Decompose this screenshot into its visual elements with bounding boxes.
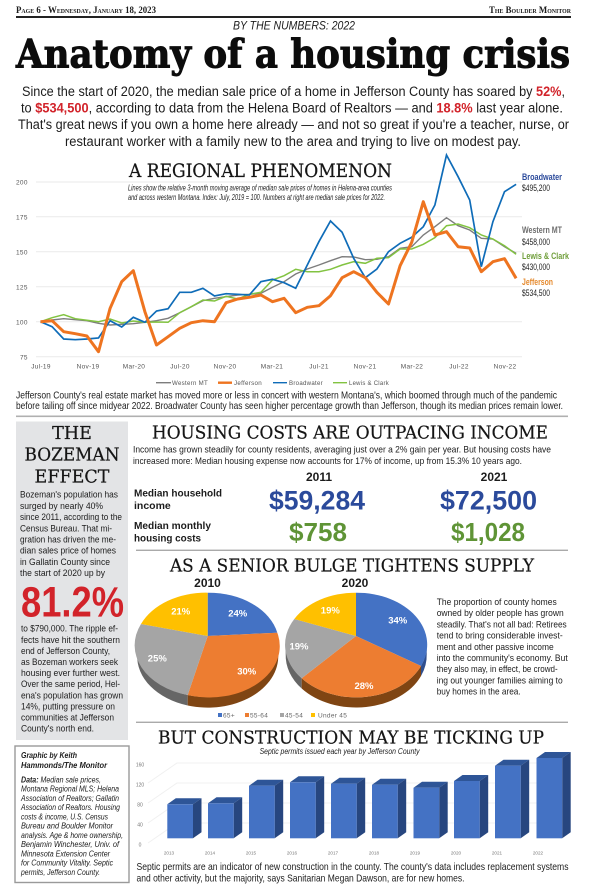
- chart note: Lines show the relative 3-month moving average of median sale prices of homes in Helena-area counties: [128, 184, 392, 192]
- x axis labels: Jul-22: [449, 364, 469, 370]
- page header: The Boulder Monitor: [489, 5, 572, 15]
- y axis labels: 75: [20, 354, 28, 362]
- column years: 2021: [481, 470, 508, 484]
- chart legend: Jefferson: [234, 380, 262, 387]
- data sources: Minnesota Extension Center: [21, 849, 110, 858]
- bar 2022: 2022: [533, 850, 544, 855]
- graphic credit: [21, 751, 108, 770]
- big number: 81.2%: [21, 579, 124, 627]
- series labels: $534,500: [522, 288, 550, 299]
- bar 2013: [164, 798, 202, 855]
- pie legend: Under 45: [318, 712, 347, 720]
- line: Jefferson: [40, 202, 516, 352]
- y axis labels: 150: [16, 250, 28, 256]
- bar 2018: 2018: [369, 850, 380, 855]
- series labels: Jefferson: [522, 277, 553, 288]
- pie chart 2010: [135, 593, 280, 708]
- bar 2014: [205, 797, 242, 855]
- senior text: The proportion of county homes: [437, 597, 557, 607]
- row labels: Median household: [134, 488, 222, 500]
- series labels: Western MT: [522, 225, 562, 236]
- chart note: [128, 184, 392, 202]
- bar 2021: [492, 760, 529, 855]
- row labels: [134, 488, 222, 545]
- data sources: Data: Median sale prices,: [21, 775, 101, 784]
- panel text upper: [20, 490, 122, 578]
- series labels: Broadwater: [522, 172, 562, 183]
- intro text: [18, 84, 569, 149]
- pie legend: 55-64: [250, 712, 268, 720]
- panel heading: THE: [52, 424, 92, 444]
- y axis labels: 80: [137, 803, 143, 809]
- data sources: analysis. Age & home ownership,: [21, 831, 123, 840]
- panel text lower: housing ever further west.: [21, 668, 120, 678]
- y axis labels: [16, 180, 28, 362]
- row labels: income: [134, 500, 171, 512]
- panel heading: [24, 424, 120, 488]
- y axis labels: 125: [16, 284, 28, 292]
- series labels: Lewis & Clark: [522, 251, 570, 262]
- row labels: Median monthly: [134, 520, 211, 532]
- senior text: ment and other passive income: [437, 642, 554, 652]
- data sources: Bureau and Boulder Monitor: [21, 822, 113, 831]
- page header: Page 6 - Wednesday, January 18, 2023: [16, 5, 156, 15]
- y axis labels: 175: [16, 214, 28, 222]
- column years: [306, 470, 508, 484]
- panel text upper: gration has driven the me-: [20, 534, 116, 544]
- x axis labels: Nov-20: [214, 364, 236, 370]
- x axis labels: Jul-21: [309, 364, 329, 370]
- income values: [269, 485, 537, 515]
- chart caption: [16, 390, 563, 412]
- data sources: permits, Jefferson County.: [20, 868, 100, 877]
- panel text lower: as Bozeman workers seek: [21, 657, 118, 667]
- y axis labels: 100: [16, 320, 28, 326]
- bar 2014: 2014: [205, 850, 216, 855]
- y axis labels: 40: [137, 823, 143, 829]
- panel text lower: ena's population has grown: [21, 690, 123, 700]
- panel text lower: to $790,000. The ripple ef-: [21, 624, 118, 634]
- panel: senior bulge: [135, 556, 568, 720]
- bar 2017: 2017: [328, 850, 339, 855]
- data sources: [20, 775, 123, 877]
- pie legend: [218, 712, 347, 720]
- panel text lower: communities at Jefferson: [21, 712, 114, 722]
- bar 2013: 2013: [164, 850, 175, 855]
- pie chart 2020: 34%: [388, 616, 408, 626]
- series labels: $495,200: [522, 183, 550, 194]
- data sources: costs & income, U.S. Census: [21, 812, 108, 821]
- intro text: to $534,500, according to data from the Helena Board of Realtors — and 18.8% last year alone.: [21, 100, 563, 116]
- pie chart 2020: 28%: [354, 681, 374, 692]
- housing cost values: $758: [289, 517, 347, 547]
- intro text: restaurant worker with a family new to the area and trying to live on modest pay.: [65, 134, 521, 149]
- section heading: AS A SENIOR BULGE TIGHTENS SUPPLY: [169, 556, 535, 577]
- senior text: ing out younger families aiming to: [437, 675, 563, 685]
- senior text: tend to bring considerable invest-: [437, 631, 563, 641]
- data sources: for Community Vitality. Septic: [21, 859, 113, 868]
- line: Western MT: [40, 218, 516, 325]
- panel text lower: County's north end.: [21, 724, 94, 734]
- pie chart 2010: 30%: [237, 666, 257, 678]
- series labels: [522, 172, 570, 299]
- pie label 2020: 2020: [342, 576, 369, 590]
- y axis labels: 200: [16, 180, 28, 186]
- intro text: That's great news if you own a home here already — and not so great if you're a teacher, nurse, or: [18, 117, 569, 132]
- senior text: buy homes in the area.: [437, 687, 521, 697]
- section intro: increased more: Median housing expense now accounts for 17% of income, up from 15.3% 10 years ago.: [133, 456, 522, 466]
- panel heading: BOZEMAN: [24, 446, 120, 466]
- pie chart 2020: 19%: [321, 606, 340, 616]
- series labels: $430,000: [522, 262, 550, 273]
- panel text lower: fects have hit the southern: [21, 635, 120, 645]
- panel: the Bozeman effect: [16, 422, 128, 740]
- bar 2016: 2016: [287, 850, 298, 855]
- y axis labels: 0: [139, 843, 142, 849]
- series labels: $458,000: [522, 237, 550, 248]
- x axis labels: Jul-20: [170, 364, 190, 370]
- chart legend: Broadwater: [289, 380, 323, 387]
- housing cost values: $1,028: [451, 517, 525, 547]
- pie chart 2020: 19%: [289, 642, 309, 652]
- bar 2017: [328, 778, 365, 855]
- chart legend: Western MT: [172, 380, 208, 387]
- construction caption: and other activity, but the majority, says Sanitarian Megan Dawson, are for new homes.: [136, 874, 464, 885]
- bar 2021: 2021: [492, 850, 503, 855]
- senior text: [437, 597, 568, 697]
- senior text: into the community's economy. But: [437, 653, 568, 663]
- senior text: steadily. That's not all bad: Retirees: [437, 619, 567, 629]
- x axis labels: Mar-21: [261, 364, 283, 370]
- panel text upper: Bozeman's population has: [20, 490, 118, 500]
- panel: construction: [136, 728, 571, 885]
- data sources: Benjamin Winchester, Univ. of: [21, 840, 120, 849]
- panel text upper: surged by nearly 40%: [20, 501, 103, 511]
- bar chart: septic permits: [136, 752, 571, 855]
- bar 2016: [287, 776, 324, 855]
- panel text upper: in Gallatin County since: [20, 557, 110, 567]
- x axis labels: Nov-22: [494, 364, 516, 370]
- pie chart 2020: [285, 593, 427, 708]
- line chart: regional phenomenon: [16, 155, 570, 387]
- chart legend: [156, 380, 389, 387]
- data sources: Association of Realtors; Gallatin: [20, 794, 119, 803]
- housing cost values: [289, 517, 525, 547]
- income values: $59,284: [269, 485, 365, 515]
- line: Broadwater: [40, 155, 516, 340]
- panel text lower: [21, 624, 123, 734]
- bar 2018: [369, 779, 406, 855]
- pie legend: 65+: [223, 712, 235, 720]
- panel text upper: dian sales price of homes: [20, 546, 116, 556]
- pie label 2010: 2010: [194, 576, 221, 590]
- graphic credit: Graphic by Keith: [21, 751, 77, 760]
- section intro: [133, 445, 551, 466]
- x axis labels: Mar-22: [401, 364, 423, 370]
- chart heading: A REGIONAL PHENOMENON: [128, 161, 392, 182]
- x axis labels: Jul-19: [31, 364, 51, 370]
- credits box: [15, 746, 129, 882]
- section intro: Income has grown steadily for county residents, averaging just over a 2% gain per year. But housing costs have: [133, 445, 551, 455]
- pie chart 2010: 24%: [228, 608, 248, 620]
- chart note: and across western Montana. Index: July, 2019 = 100. Numbers at right are median sale prices for 2022.: [128, 193, 385, 202]
- y axis labels: 160: [136, 763, 144, 769]
- bar 2020: [451, 775, 488, 855]
- panel: housing costs vs income: [133, 422, 551, 547]
- bar 2022: [533, 752, 571, 855]
- chart legend: Lewis & Clark: [349, 380, 389, 387]
- senior text: they also may, in effect, be crowd-: [437, 664, 558, 674]
- construction caption: [136, 862, 568, 885]
- x axis labels: [31, 364, 516, 370]
- panel text lower: Over the same period, Hel-: [21, 679, 120, 689]
- pie chart 2010: 25%: [148, 654, 167, 664]
- bar 2015: [246, 780, 283, 855]
- panel text upper: since 2011, according to the: [20, 512, 122, 522]
- kicker: BY THE NUMBERS: 2022: [233, 20, 356, 32]
- senior text: owned by older people has grown: [437, 608, 564, 618]
- row labels: housing costs: [134, 533, 201, 545]
- bar 2015: 2015: [246, 850, 257, 855]
- panel text upper: Census Bureau. That mi-: [20, 523, 112, 533]
- section heading: BUT CONSTRUCTION MAY BE TICKING UP: [158, 728, 544, 748]
- chart subtitle: Septic permits issued each year by Jefferson County: [260, 747, 420, 756]
- pie legend: 45-54: [285, 712, 303, 720]
- bar 2020: 2020: [451, 850, 462, 855]
- x axis labels: Mar-20: [123, 364, 145, 370]
- page header: [16, 5, 572, 18]
- section heading: HOUSING COSTS ARE OUTPACING INCOME: [152, 422, 548, 443]
- column years: 2011: [306, 470, 332, 484]
- data sources: Association of Realtors. Housing: [20, 803, 120, 812]
- line: Lewis & Clark: [40, 224, 516, 323]
- pie chart 2010: 21%: [171, 606, 191, 618]
- panel text upper: the start of 2020 up by: [20, 568, 105, 578]
- x axis labels: Nov-19: [77, 364, 99, 370]
- panel heading: EFFECT: [35, 468, 110, 488]
- x axis labels: Nov-21: [354, 364, 376, 370]
- y axis labels: [136, 763, 144, 849]
- income values: $72,500: [440, 485, 537, 515]
- data sources: Montana Regional MLS; Helena: [21, 785, 119, 794]
- panel text lower: 14%, putting pressure on: [21, 701, 115, 711]
- graphic credit: Hammonds/The Monitor: [21, 761, 108, 770]
- bar 2019: 2019: [410, 850, 421, 855]
- intro text: Since the start of 2020, the median sale price of a home in Jefferson County has soared by 52%,: [22, 84, 565, 99]
- bar 2019: [410, 782, 448, 855]
- y axis labels: 120: [136, 783, 144, 789]
- panel text lower: end of Jefferson County,: [21, 646, 110, 656]
